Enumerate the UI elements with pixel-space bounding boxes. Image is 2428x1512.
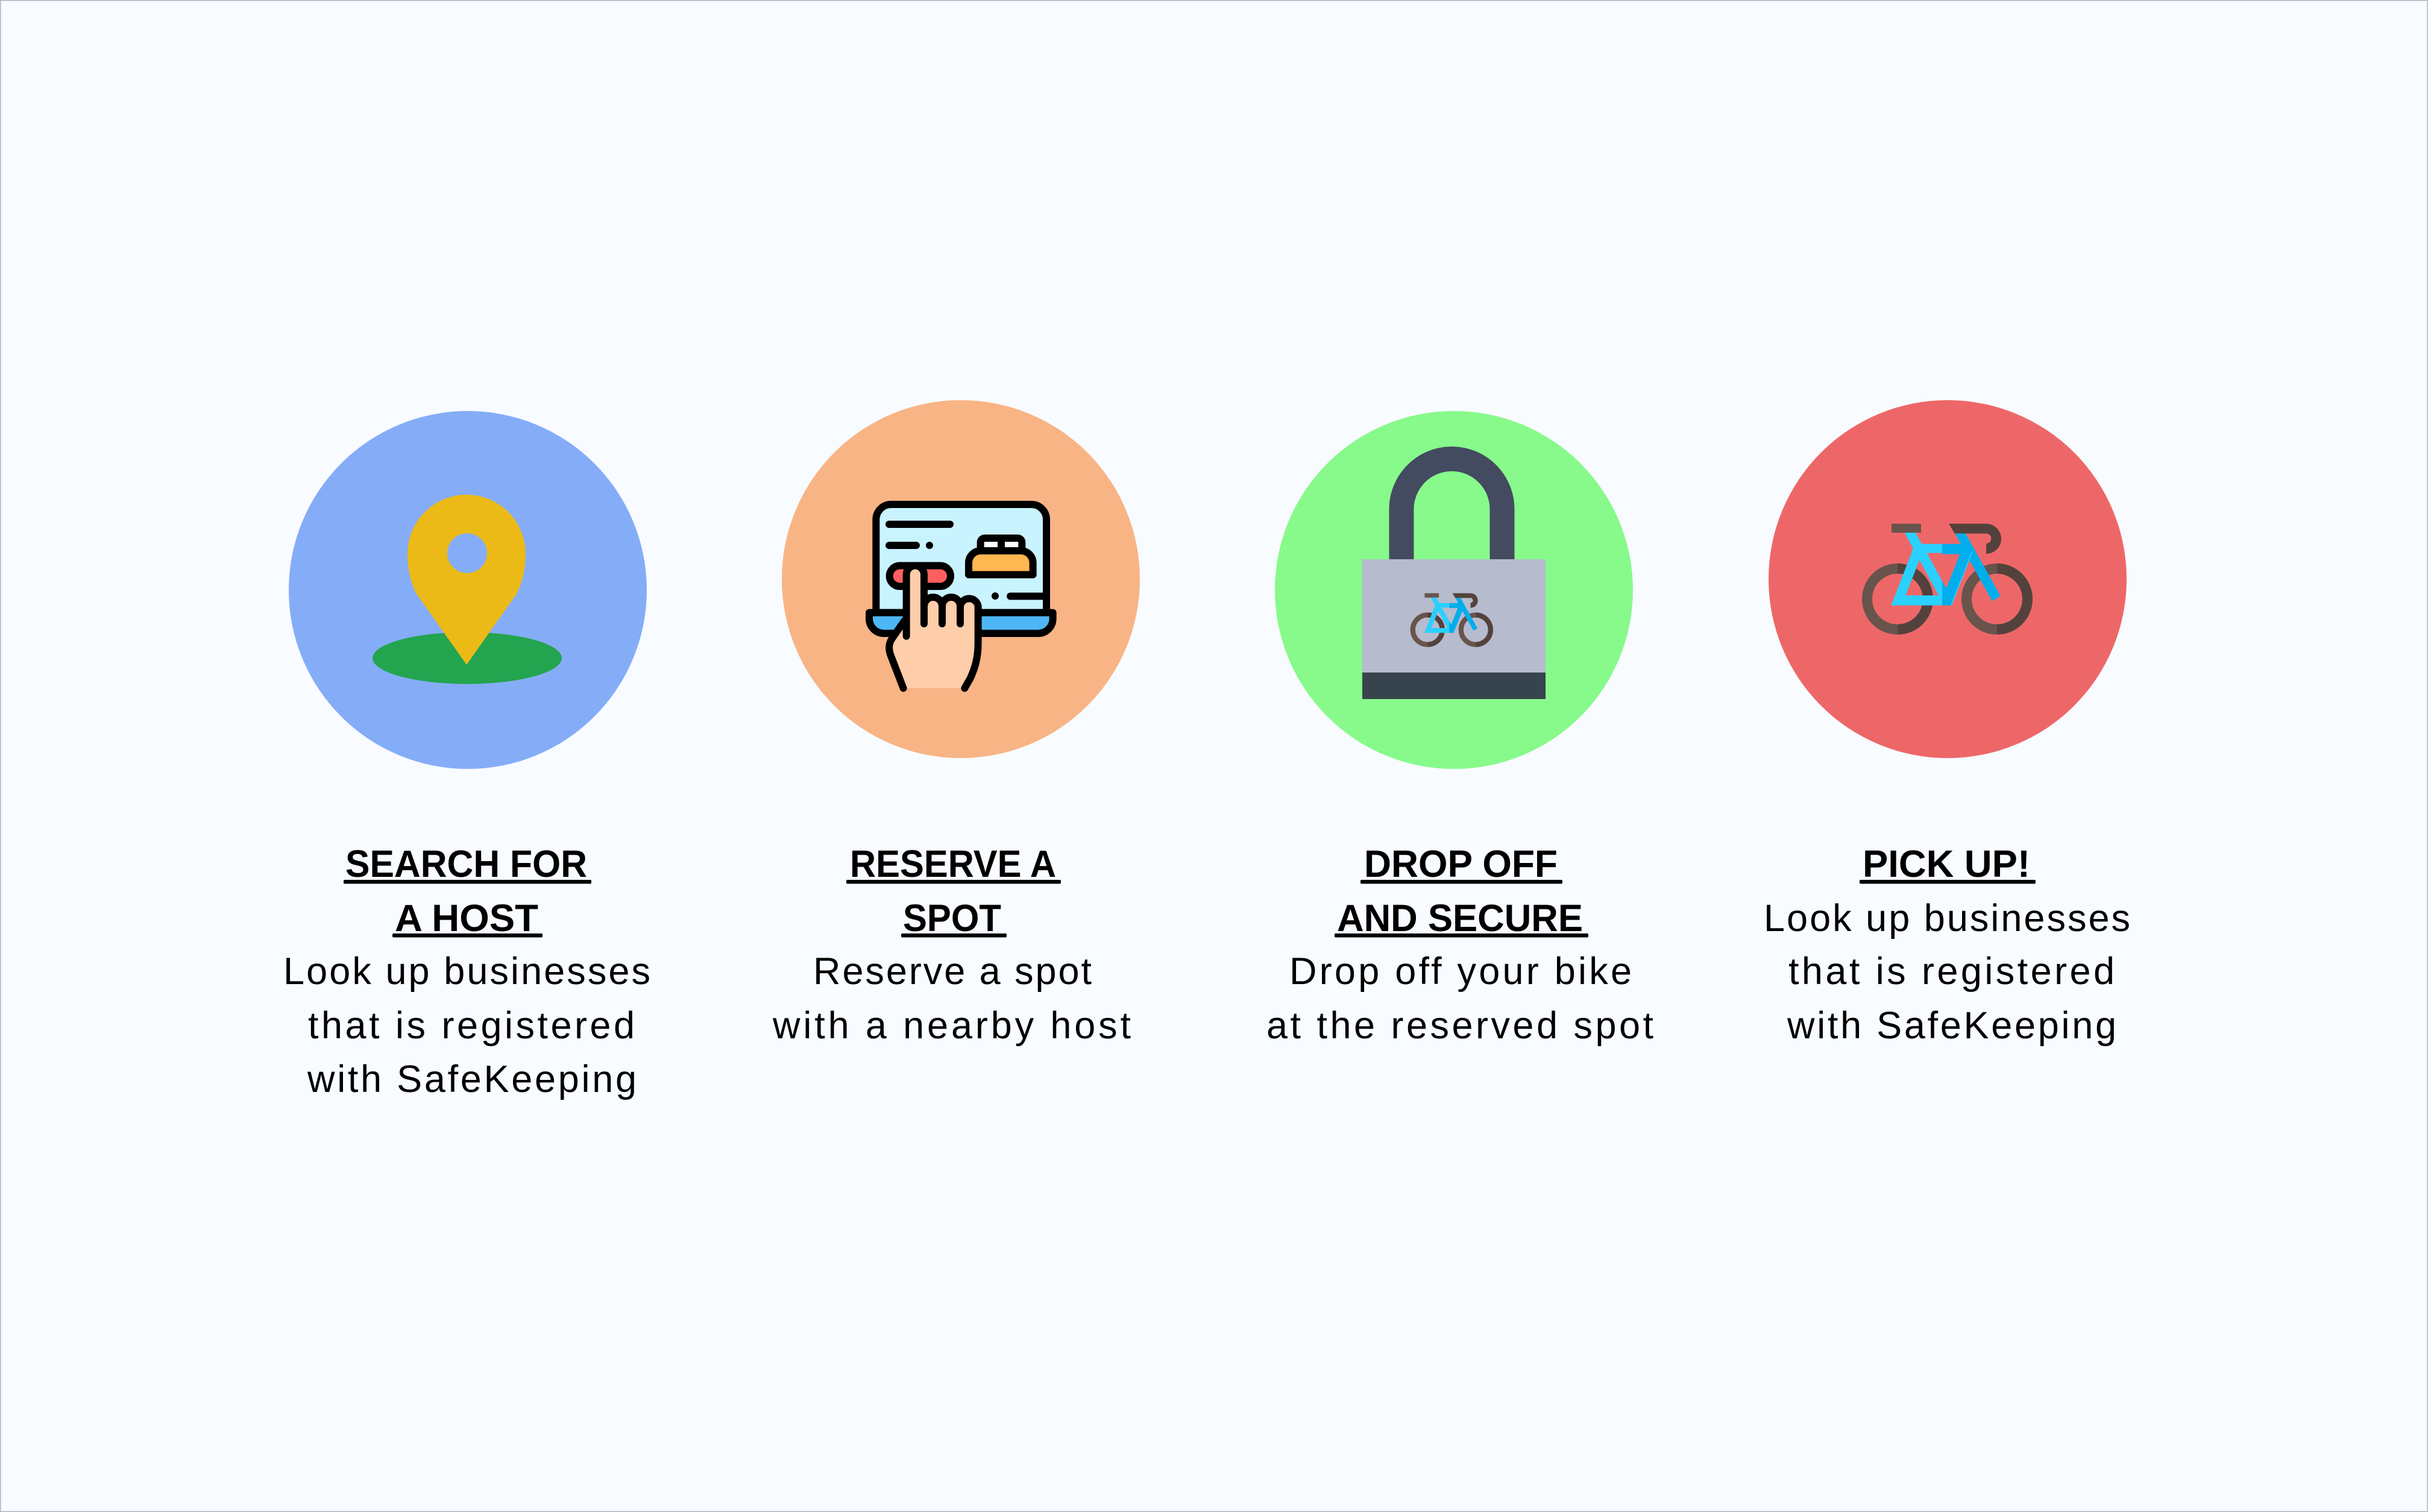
heading: pick up: PICK UP!	[1863, 843, 2030, 885]
circle: green background	[1275, 411, 1633, 769]
heading: reserve a spot: RESERVE A	[850, 843, 1056, 885]
circle: orange background	[782, 400, 1140, 758]
text: step 1 description: that is registered	[308, 1005, 635, 1047]
heading: search for a host	[344, 843, 591, 940]
heading: drop off and secure: AND SECURE	[1337, 897, 1583, 940]
heading: search for a host: A HOST	[395, 897, 538, 940]
icon: hand tapping laptop	[869, 504, 1053, 688]
text: step 2 description: Reserve a spot	[813, 950, 1092, 993]
text: step 4 description: with SafeKeeping	[1787, 1005, 2116, 1047]
text: step 4 description: Look up businesses	[1764, 897, 2130, 940]
text: step 1 description: Look up businesses	[283, 950, 650, 993]
icon: padlock with bike	[1362, 459, 1546, 699]
panel: step 4 pick up	[1764, 400, 2130, 1047]
heading: drop off and secure	[1335, 843, 1588, 940]
text: step 4 description: that is registered	[1788, 950, 2115, 993]
icon: map pin on green ground	[373, 495, 562, 684]
heading: drop off and secure: DROP OFF	[1364, 843, 1558, 885]
icon: bicycle	[1867, 524, 2027, 629]
heading: reserve a spot: SPOT	[903, 897, 1001, 940]
heading: reserve a spot	[846, 843, 1061, 940]
panel: step 3 drop off and secure	[1266, 411, 1653, 1047]
text: step 4 description	[1764, 897, 2130, 1047]
panel: step 2 reserve a spot	[772, 400, 1140, 1047]
text: step 3 description: at the reserved spot	[1266, 1005, 1653, 1047]
circle: red background	[1769, 400, 2127, 758]
panel: step 1 search for a host	[283, 411, 650, 1100]
text: step 1 description: with SafeKeeping	[307, 1058, 637, 1100]
text: step 2 description: with a nearby host	[772, 1005, 1131, 1047]
text: step 3 description: Drop off your bike	[1289, 950, 1632, 993]
circle: blue background	[289, 411, 647, 769]
heading: search for a host: SEARCH FOR	[345, 843, 587, 885]
text: step 2 description	[772, 950, 1131, 1047]
text: step 1 description	[283, 950, 650, 1100]
text: step 3 description	[1266, 950, 1653, 1047]
